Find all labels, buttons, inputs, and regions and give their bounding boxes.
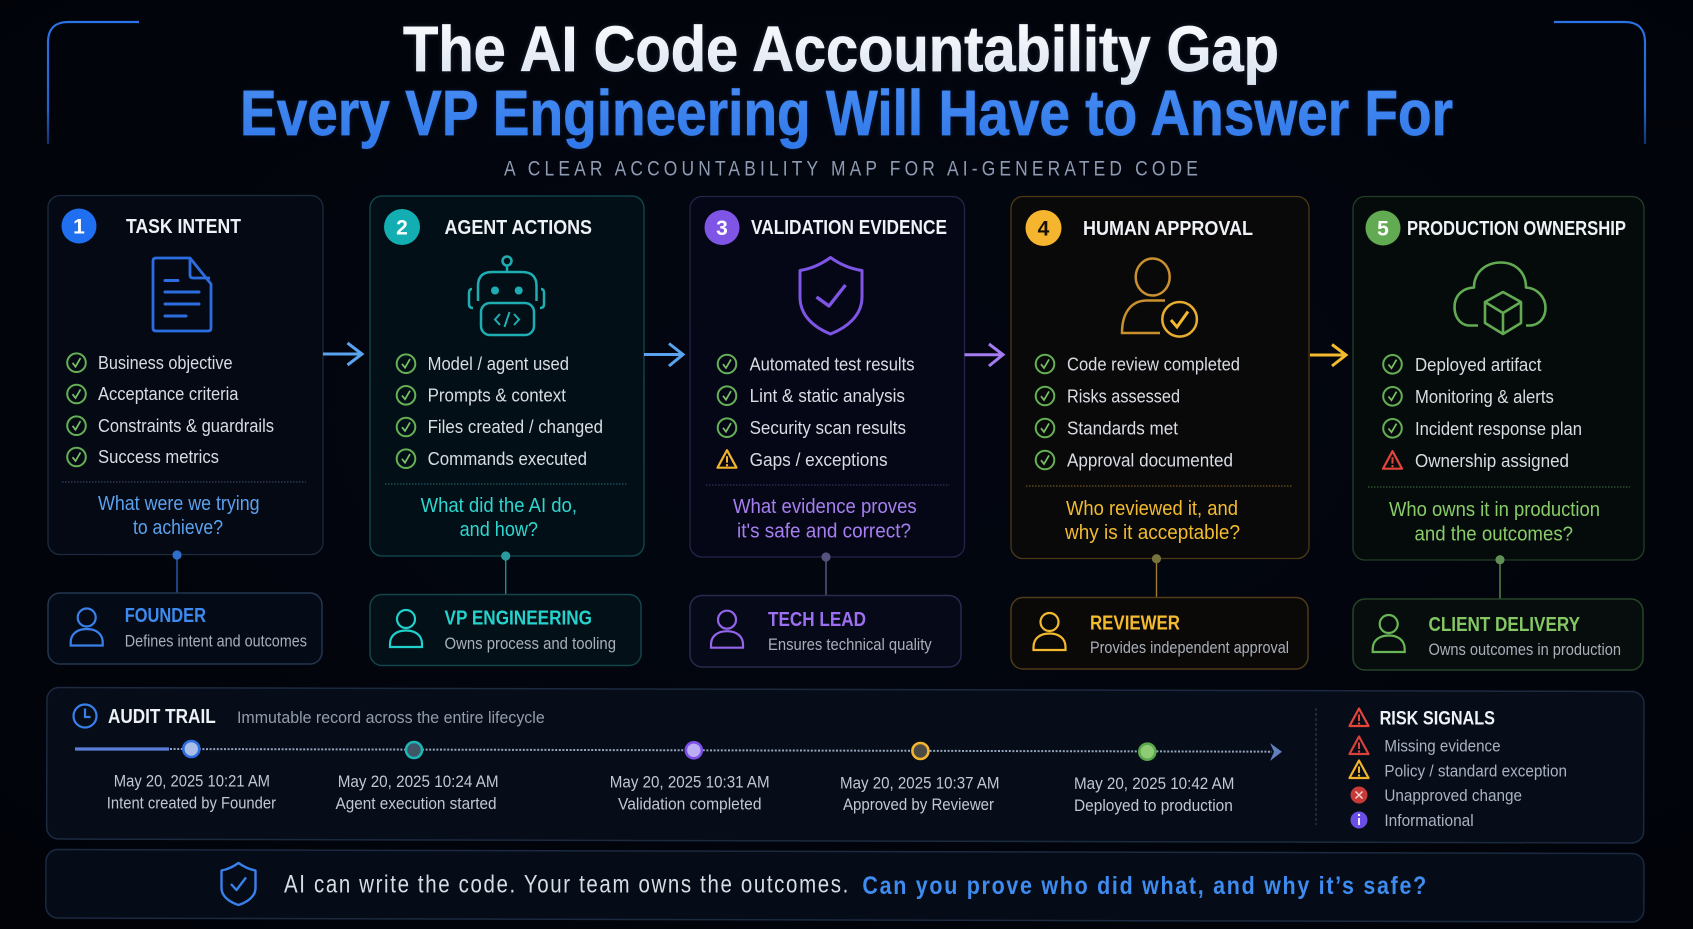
question: validation evidence: it's safe and correct? [737, 520, 911, 543]
checklist: human approval: Code review completed [1067, 354, 1240, 374]
heading: human approval: HUMAN APPROVAL [1083, 217, 1253, 240]
milestone node 5 [1139, 744, 1155, 760]
role text: reviewer: Provides independent approval [1090, 639, 1289, 657]
role text: founder: FOUNDER [125, 604, 206, 627]
step number 2 [384, 209, 420, 245]
icon: person with check [1122, 258, 1197, 337]
icon: vp person [390, 610, 422, 647]
role card: vp engineering [370, 594, 641, 666]
milestone node 3 [686, 742, 702, 758]
role text: vp engineering: Owns process and tooling [444, 635, 616, 653]
connector: step 3 to tech lead [821, 552, 831, 595]
checklist: human approval [1036, 354, 1240, 470]
role card: founder [48, 593, 322, 664]
question: human approval: why is it acceptable? [1064, 521, 1240, 544]
role card: tech lead [690, 596, 961, 667]
role text: founder: Defines intent and outcomes [125, 633, 307, 651]
corner bracket: top left [48, 22, 139, 144]
risk signals legend [1350, 708, 1567, 830]
question: human approval [1064, 497, 1240, 544]
role text: tech lead: Ensures technical quality [768, 636, 932, 654]
timeline label 1 [107, 772, 276, 813]
checklist: agent actions: Files created / changed [428, 416, 603, 437]
footer statement: AI can write the code. Your team owns the outcomes. [284, 870, 850, 898]
role text: reviewer [1090, 612, 1289, 657]
checklist: human approval: Standards met [1067, 418, 1178, 438]
question: agent actions [421, 494, 577, 541]
role text: vp engineering: VP ENGINEERING [444, 607, 592, 630]
timeline label 2: Agent execution started [336, 794, 496, 813]
checklist: human approval: Risks assessed [1067, 386, 1180, 406]
icon: founder person [71, 608, 103, 646]
step number 2: 2 [396, 216, 408, 240]
step number 5: 5 [1377, 218, 1389, 240]
checklist: production ownership: Incident response plan [1415, 418, 1582, 439]
heading: validation evidence: VALIDATION EVIDENCE [751, 216, 947, 239]
arrow: step 4 to 5 [1310, 344, 1346, 366]
panel: production ownership [1353, 196, 1644, 560]
role text: tech lead: TECH LEAD [768, 608, 866, 631]
timeline label 4: Approved by Reviewer [843, 795, 994, 814]
timeline label 3 [610, 772, 770, 813]
question: production ownership [1389, 498, 1600, 546]
timeline arrowhead [1270, 743, 1282, 761]
checklist: task intent: Business objective [98, 352, 232, 373]
checklist: agent actions [397, 353, 603, 469]
audit description: Immutable record across the entire lifecycle [237, 708, 545, 727]
corner bracket: top right [1554, 22, 1645, 144]
risk: unapproved change: Unapproved change [1384, 786, 1522, 805]
step number 1: 1 [73, 216, 85, 238]
role text: client delivery [1428, 613, 1621, 659]
icon: cloud with cube [1454, 262, 1546, 334]
icon: document [153, 258, 211, 331]
role text: tech lead [768, 608, 932, 654]
role text: founder [125, 604, 307, 651]
role card: client delivery [1353, 599, 1643, 670]
panel: validation evidence [690, 196, 964, 557]
checklist: agent actions: Model / agent used [428, 353, 569, 374]
title: Every VP Engineering Will Have to Answer For [240, 77, 1453, 149]
timeline label 4 [840, 773, 1000, 814]
footer question: Can you prove who did what, and why it’s safe? [862, 872, 1428, 900]
checklist: validation evidence: Gaps / exceptions [750, 449, 888, 470]
checklist: validation evidence: Automated test results [750, 354, 914, 374]
risk: policy exception: Policy / standard exception [1384, 762, 1567, 781]
timeline label 2: May 20, 2025 10:24 AM [338, 772, 499, 791]
connector: step 1 to founder [172, 550, 182, 593]
role text: client delivery: Owns outcomes in production [1428, 641, 1621, 659]
step number 1 [62, 208, 96, 244]
risk heading [1350, 708, 1495, 730]
icon: shield [800, 258, 862, 334]
audit heading: AUDIT TRAIL [108, 705, 216, 728]
checklist: agent actions: Commands executed [428, 448, 587, 469]
role card: reviewer [1011, 598, 1308, 669]
risk heading: RISK SIGNALS [1380, 708, 1495, 730]
checklist: production ownership: Deployed artifact [1415, 354, 1541, 375]
icon: reviewer person [1034, 613, 1066, 650]
role text: reviewer: REVIEWER [1090, 612, 1180, 635]
icon: client delivery person [1373, 615, 1405, 652]
step number 3 [704, 210, 740, 245]
question: task intent: What were we trying [98, 492, 260, 515]
timeline label 1: May 20, 2025 10:21 AM [114, 772, 270, 791]
milestone node 1 [183, 741, 199, 757]
risk: missing evidence: Missing evidence [1384, 737, 1500, 756]
checklist: task intent: Success metrics [98, 446, 219, 467]
title: The AI Code Accountability Gap [403, 13, 1279, 85]
checklist: task intent: Acceptance criteria [98, 383, 239, 404]
panel: human approval [1011, 196, 1309, 558]
milestone node 4 [912, 743, 928, 759]
question: validation evidence [733, 495, 917, 543]
question: production ownership: Who owns it in production [1389, 498, 1600, 521]
step number 3: 3 [716, 217, 728, 240]
heading: production ownership: PRODUCTION OWNERSHIP [1407, 217, 1626, 240]
timeline label 2 [336, 772, 499, 813]
heading: task intent: TASK INTENT [126, 215, 241, 238]
title: The AI Code Accountability Gap [403, 13, 1279, 85]
arrow: step 3 to 4 [964, 344, 1003, 366]
timeline label 5: Deployed to production [1074, 796, 1233, 815]
question: agent actions: and how? [460, 518, 538, 541]
checklist: production ownership [1383, 354, 1582, 471]
panel: agent actions [370, 196, 644, 556]
arrow: step 1 to 2 [323, 343, 362, 365]
question: production ownership: and the outcomes? [1414, 523, 1573, 546]
title [240, 13, 1453, 149]
icon: tech lead person [711, 611, 743, 648]
risk: informational [1350, 811, 1474, 830]
risk: missing evidence [1350, 736, 1500, 756]
role text: client delivery: CLIENT DELIVERY [1428, 613, 1580, 636]
icon: clock [74, 704, 96, 728]
role text: vp engineering [444, 607, 616, 653]
checklist: validation evidence: Lint & static analysis [750, 385, 905, 406]
checklist: task intent: Constraints & guardrails [98, 415, 274, 436]
question: task intent: to achieve? [133, 516, 223, 539]
title: Every VP Engineering Will Have to Answer For [240, 77, 1453, 149]
risk: informational: Informational [1384, 811, 1474, 830]
timeline label 5: May 20, 2025 10:42 AM [1074, 774, 1234, 793]
question: validation evidence: What evidence proves [733, 495, 917, 518]
checklist: validation evidence: Security scan results [750, 417, 906, 438]
question: agent actions: What did the AI do, [421, 494, 577, 517]
milestone node 2 [406, 742, 422, 758]
heading: agent actions: AGENT ACTIONS [444, 216, 592, 239]
timeline [75, 741, 1282, 761]
timeline label 5 [1074, 774, 1234, 815]
question: human approval: Who reviewed it, and [1066, 497, 1238, 520]
question: task intent [98, 492, 260, 539]
icon: footer shield [222, 863, 256, 905]
checklist: validation evidence [718, 354, 914, 470]
timeline label 3: Validation completed [618, 794, 762, 813]
step number 4 [1026, 210, 1062, 246]
panel: footer callout [46, 850, 1644, 922]
checklist: human approval: Approval documented [1067, 450, 1233, 470]
connector: step 2 to vp engineering [501, 551, 510, 594]
connector: step 5 to client delivery [1495, 555, 1505, 599]
checklist: production ownership: Monitoring & alerts [1415, 386, 1554, 407]
checklist: task intent [67, 352, 274, 467]
timeline label 1: Intent created by Founder [107, 794, 276, 813]
arrow: step 2 to 3 [644, 344, 683, 366]
connector: step 4 to reviewer [1152, 554, 1161, 597]
checklist: agent actions: Prompts & context [428, 384, 566, 406]
timeline label 3: May 20, 2025 10:31 AM [610, 772, 770, 791]
panel: audit trail [47, 688, 1644, 843]
icon: robot [469, 256, 544, 335]
panel: task intent [48, 196, 323, 554]
step number 5 [1366, 210, 1400, 246]
step number 4: 4 [1038, 218, 1050, 240]
checklist: production ownership: Ownership assigned [1415, 450, 1569, 471]
subtitle: A CLEAR ACCOUNTABILITY MAP FOR AI-GENERATED CODE [504, 158, 1202, 180]
timeline label 4: May 20, 2025 10:37 AM [840, 773, 1000, 792]
